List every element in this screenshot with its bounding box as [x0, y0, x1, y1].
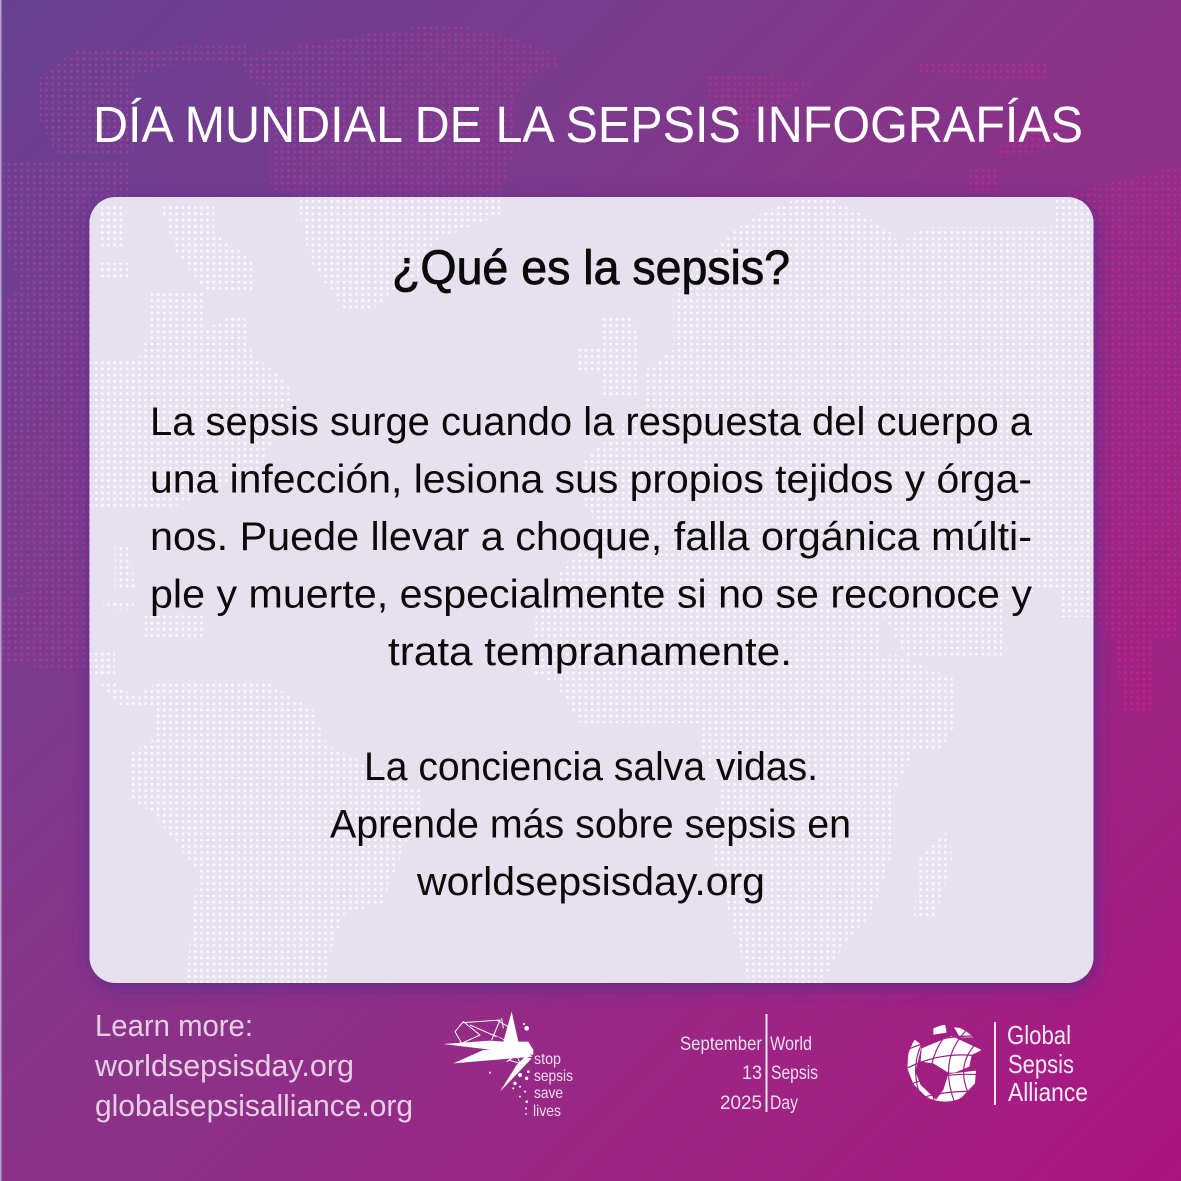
- logo: World Sepsis Day date: [680, 1014, 818, 1114]
- icon: splatter: [443, 1012, 533, 1115]
- left edge line: [0, 0, 2, 1181]
- icon: globe: [907, 1023, 983, 1103]
- date divider: [766, 1014, 768, 1112]
- awareness message: [330, 745, 851, 904]
- logo: Global Sepsis Alliance: [907, 1020, 1088, 1107]
- footer links: Learn more:: [95, 1008, 253, 1043]
- logo wording: save: [534, 1085, 563, 1102]
- logo wording: sepsis: [534, 1068, 573, 1085]
- event name: World: [770, 1034, 812, 1055]
- event name: Day: [770, 1093, 798, 1114]
- body paragraph: [150, 400, 1033, 674]
- footer links: [94, 1008, 413, 1123]
- logo wording: Global: [1007, 1020, 1071, 1050]
- logo wording: stop: [534, 1051, 561, 1068]
- date lines: 2025: [720, 1093, 762, 1114]
- awareness message: worldsepsisday.org: [416, 860, 765, 904]
- logo wording: Alliance: [1008, 1077, 1088, 1107]
- logo wording: [533, 1051, 573, 1120]
- footer links: globalsepsisalliance.org: [95, 1088, 413, 1123]
- awareness message: Aprende más sobre sepsis en: [330, 802, 851, 846]
- date lines: September: [680, 1034, 763, 1055]
- footer links: worldsepsisday.org: [94, 1048, 354, 1083]
- event name: Sepsis: [771, 1063, 818, 1084]
- body paragraph: trata tempranamente.: [388, 630, 792, 674]
- background dotted world map: [2, 23, 1181, 712]
- awareness message: La conciencia salva vidas.: [364, 745, 818, 789]
- body paragraph: una infección, lesiona sus propios tejidos y órga-: [150, 458, 1032, 502]
- logo divider: [994, 1022, 996, 1105]
- logo wording: lives: [533, 1103, 561, 1120]
- event name: [770, 1034, 818, 1114]
- body paragraph: La sepsis surge cuando la respuesta del cuerpo a: [150, 400, 1033, 444]
- date lines: [680, 1034, 763, 1114]
- card dotted world map: [89, 197, 1094, 983]
- card background: [90, 197, 1094, 983]
- logo wording: [1007, 1020, 1088, 1107]
- body paragraph: nos. Puede llevar a choque, falla orgánica múlti-: [150, 515, 1032, 559]
- panel: main card: [89, 197, 1094, 983]
- body paragraph: ple y muerte, especialmente si no se reconoce y: [150, 572, 1032, 616]
- card heading: ¿Qué es la sepsis?: [392, 242, 790, 295]
- title: DÍA MUNDIAL DE LA SEPSIS INFOGRAFÍAS: [93, 96, 1083, 153]
- logo wording: Sepsis: [1008, 1049, 1074, 1079]
- logo: stop sepsis save lives: [443, 1012, 573, 1120]
- date lines: 13: [742, 1063, 762, 1084]
